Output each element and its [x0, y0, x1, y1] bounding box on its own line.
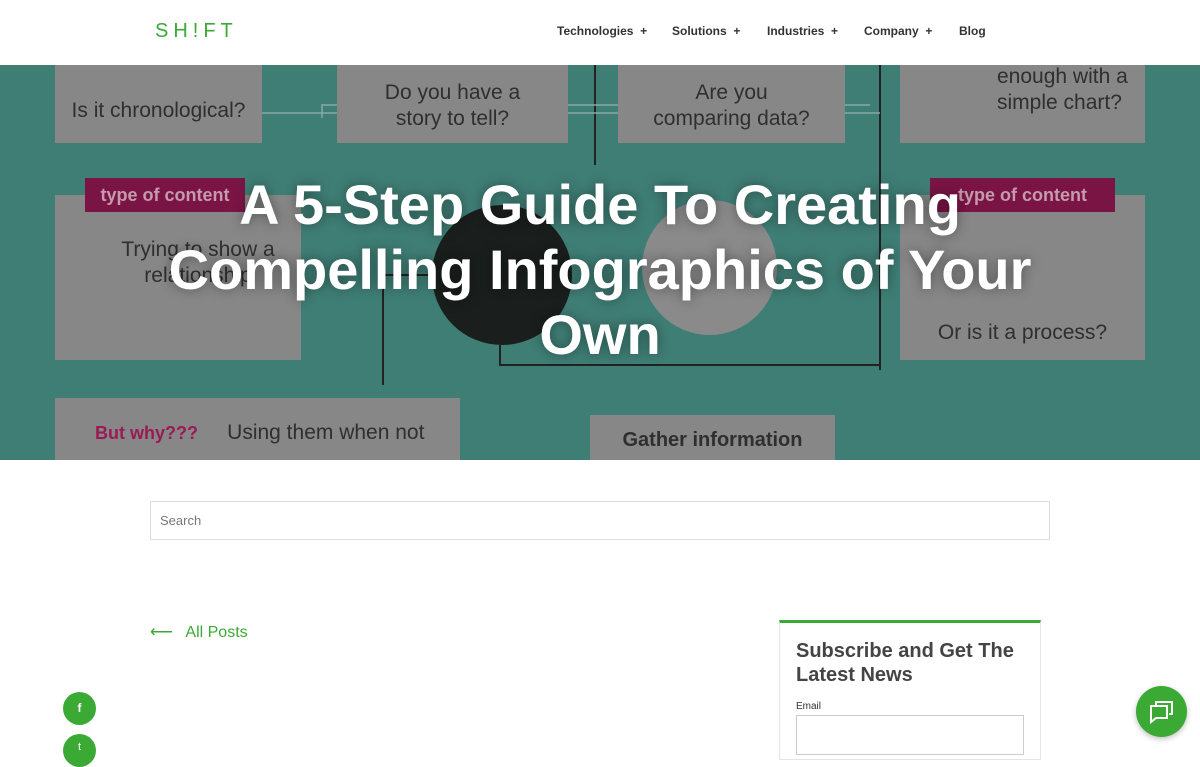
- box: process: [900, 195, 1145, 360]
- box: relationship: Trying to show a: [121, 238, 275, 261]
- logo: SH!FT: [155, 20, 238, 42]
- tag: type of content right: type of content: [958, 185, 1087, 205]
- social: twitter: [63, 734, 96, 767]
- social: facebook: [63, 692, 96, 725]
- box: story: [337, 60, 568, 143]
- social: twitter: t: [78, 741, 81, 753]
- tag: type of content left: type of content: [100, 185, 230, 205]
- box: comparing: comparing data?: [653, 107, 810, 130]
- box: chronological: Is it chronological?: [72, 99, 245, 122]
- box: simple chart: enough with a: [997, 65, 1128, 88]
- box: but why: [55, 398, 460, 468]
- navigation: [557, 24, 986, 38]
- chat button: [1136, 686, 1187, 737]
- all posts link: ⟵ All Posts: [150, 624, 248, 641]
- flowchart lines: [262, 65, 881, 385]
- box: simple chart: [900, 60, 1145, 143]
- box: simple chart: simple chart?: [997, 91, 1122, 114]
- box: story: story to tell?: [396, 107, 509, 130]
- subscribe card: [779, 620, 1041, 760]
- box: gather information: [590, 415, 835, 475]
- tag: type of content right: [930, 178, 1115, 212]
- box: relationship: relationship: [144, 264, 252, 287]
- tag: type of content left: [85, 178, 245, 212]
- header: Industries +: [767, 24, 838, 38]
- box: relationship: [55, 195, 301, 360]
- social: facebook: f: [78, 701, 82, 715]
- black circle: [432, 205, 572, 345]
- hero banner: [0, 65, 1200, 460]
- grey circle: [642, 200, 777, 335]
- header: Technologies +: [557, 24, 647, 38]
- box: but why: But why??? Using them when not: [95, 421, 424, 444]
- box: story: Do you have a: [385, 81, 520, 104]
- box: process: Or is it a process?: [938, 321, 1107, 344]
- box: gather information: Gather information: [622, 429, 802, 451]
- search box: [150, 501, 1050, 540]
- email input: [796, 715, 1024, 755]
- title: A 5-Step Guide To Creating Compelling Infographics of Your Own: [169, 173, 1031, 366]
- box: comparing: Are you: [695, 81, 768, 104]
- box: comparing: [618, 60, 845, 143]
- email label: Email: [796, 701, 821, 712]
- search box: Search: [160, 513, 201, 528]
- box: chronological: [55, 60, 262, 143]
- header: Company +: [864, 24, 932, 38]
- header: Solutions +: [672, 24, 740, 38]
- header: Blog: [959, 24, 986, 38]
- header: [0, 0, 1200, 65]
- subscribe heading: Subscribe and Get The Latest News: [796, 640, 1014, 686]
